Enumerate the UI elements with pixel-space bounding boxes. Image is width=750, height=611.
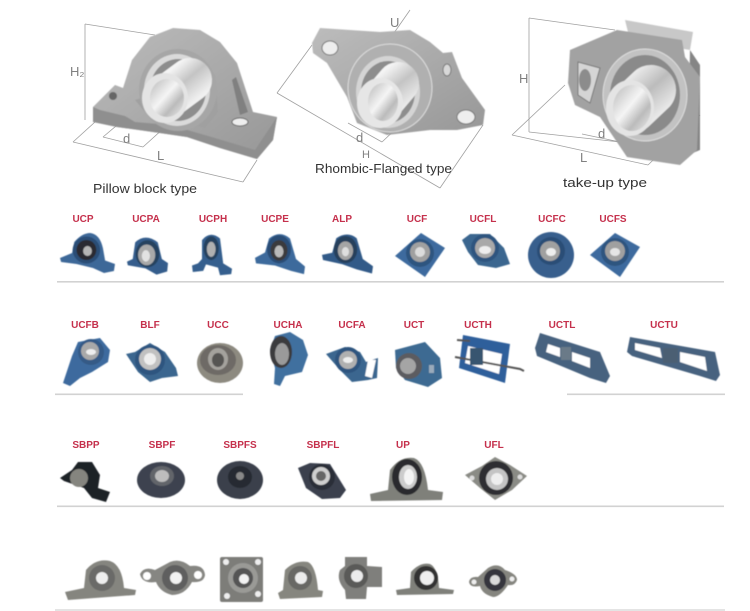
row 3 labels: UP xyxy=(396,440,410,451)
row 1 labels: UCFS xyxy=(599,214,627,225)
row 2 labels xyxy=(71,320,678,331)
row 3 labels: SBPFS xyxy=(223,440,257,451)
dimension label H: H xyxy=(362,149,370,161)
row 2 labels: UCTL xyxy=(549,320,575,331)
dimension label d: d xyxy=(598,126,605,141)
icon: UCT xyxy=(395,342,442,387)
row 2 labels: UCTU xyxy=(650,320,678,331)
row 2 labels: UCHA xyxy=(274,320,302,331)
dimension lines: rhombic xyxy=(277,10,483,188)
diagram: take-up type xyxy=(512,18,700,165)
row 1 labels: UCP xyxy=(72,214,94,225)
caption: rhombic: Rhombic-Flanged type xyxy=(315,161,452,176)
row 4 bearings xyxy=(65,557,517,602)
icon: UCPE xyxy=(255,234,305,274)
icon: steel take-up xyxy=(339,557,382,599)
icon: steel pillow block compact xyxy=(278,562,323,599)
icon: UCTH xyxy=(455,335,524,383)
icon: ALP xyxy=(322,235,373,274)
row 2 labels: UCFB xyxy=(71,320,99,331)
row 3 labels: SBPP xyxy=(72,440,100,451)
row 1 labels: UCFC xyxy=(538,214,566,225)
rhombic flange housing xyxy=(312,28,485,135)
diagram: pillow block type xyxy=(70,24,277,182)
row 1 labels: UCPA xyxy=(132,214,160,225)
dimension label d: d xyxy=(123,131,130,146)
icon: UCPA xyxy=(127,238,168,275)
icon: UCFB xyxy=(63,338,110,386)
dimension label L: L xyxy=(580,150,587,165)
icon: UFL xyxy=(465,457,527,500)
caption: take-up: take-up type xyxy=(563,175,647,190)
dimension label U: U xyxy=(390,15,399,30)
take-up housing xyxy=(568,20,700,165)
icon: UCTL xyxy=(535,333,610,383)
dimension lines: pillow block xyxy=(73,24,257,182)
row 2 labels: UCT xyxy=(404,320,424,331)
icon: UCFC xyxy=(528,232,574,278)
row 2 labels: UCFA xyxy=(338,320,366,331)
icon: steel two-bolt flange xyxy=(140,561,205,595)
caption: pillow block: Pillow block type xyxy=(93,181,197,196)
row 1 bearings xyxy=(60,232,640,278)
dimension label H2: H₂ xyxy=(70,64,84,79)
row 1 labels: UCF xyxy=(407,214,427,225)
pillow block housing xyxy=(93,28,277,159)
icon: steel pillow block xyxy=(65,560,136,600)
icon: UCF xyxy=(395,233,445,277)
row 3 labels: SBPFL xyxy=(307,440,339,451)
row 3 labels: UFL xyxy=(484,440,504,451)
row 1 labels: ALP xyxy=(332,214,352,225)
icon: UCPH xyxy=(192,235,232,275)
row 2 labels: UCTH xyxy=(464,320,492,331)
icon: UCFA xyxy=(326,347,378,382)
icon: UCFS xyxy=(590,233,640,277)
icon: steel low pillow block xyxy=(396,564,454,595)
dimension label L: L xyxy=(157,148,164,163)
dimension label d: d xyxy=(356,130,363,145)
diagram: rhombic-flanged type xyxy=(277,10,485,188)
icon: SBPFS xyxy=(217,461,263,499)
icon: UCTU xyxy=(627,337,720,381)
row 3 labels: SBPF xyxy=(149,440,175,451)
dimension label H: H xyxy=(519,71,528,86)
icon: UCP xyxy=(60,233,115,273)
row 2 labels: UCC xyxy=(207,320,229,331)
row 1 labels: UCFL xyxy=(470,214,496,225)
row 1 labels: UCPH xyxy=(199,214,227,225)
icon: SBPP xyxy=(60,462,110,502)
icon: UP xyxy=(370,458,443,501)
icon: SBPFL xyxy=(298,463,346,499)
icon: UCC xyxy=(197,343,243,383)
icon: UCFL xyxy=(462,234,510,268)
row 1 labels: UCPE xyxy=(261,214,289,225)
icon: steel four-bolt flange xyxy=(220,557,263,602)
icon: BLF xyxy=(126,343,178,382)
row 3 bearings xyxy=(60,457,527,502)
row 3 labels xyxy=(72,440,504,451)
row 1 labels xyxy=(72,214,627,225)
dimension lines: take-up xyxy=(512,18,700,165)
row 2 bearings xyxy=(63,332,720,387)
row 2 labels: BLF xyxy=(140,320,160,331)
icon: UCHA xyxy=(270,332,308,386)
icon: SBPF xyxy=(137,462,185,498)
icon: steel small flange xyxy=(469,565,517,597)
